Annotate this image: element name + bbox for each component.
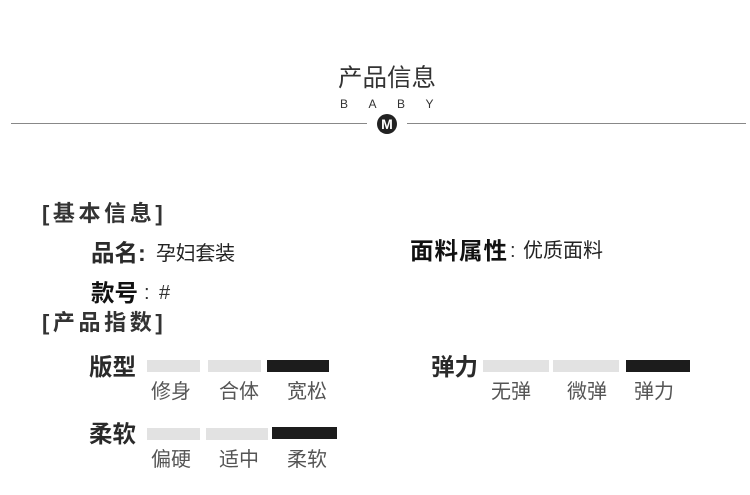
- product name: [91, 240, 235, 266]
- index: softness: [89, 421, 337, 471]
- index: elasticity: [431, 354, 690, 403]
- index: fit: 合体: [219, 381, 259, 403]
- product name: 孕妇套装: [156, 243, 235, 265]
- index: elasticity: 微弹: [567, 381, 607, 403]
- fabric property: [410, 238, 603, 264]
- index: elasticity: 弹力: [431, 354, 478, 380]
- index: softness: 柔软: [287, 449, 327, 471]
- fabric property: 面料属性: [410, 238, 508, 264]
- product name: 品名:: [91, 240, 146, 266]
- index: fit: 版型: [89, 354, 136, 380]
- heading: basic info: [基本信息]: [42, 201, 166, 226]
- style number: #: [159, 282, 170, 304]
- index: elasticity: 无弹: [491, 381, 531, 403]
- title: 产品信息: [338, 65, 436, 92]
- index: fit: 宽松: [287, 381, 327, 403]
- style number: :: [144, 282, 150, 304]
- style number: [91, 280, 170, 306]
- index: softness: 柔软: [89, 421, 136, 447]
- divider with M badge: M: [381, 116, 393, 132]
- subtitle: BABY: BABY: [340, 97, 454, 111]
- index: fit: 修身: [151, 381, 191, 403]
- style number: 款号: [91, 280, 138, 306]
- index: softness: 偏硬: [151, 449, 191, 471]
- heading: product index: [产品指数]: [42, 310, 166, 335]
- index: elasticity: 弹力: [634, 381, 674, 403]
- fabric property: :: [510, 240, 516, 262]
- fabric property: 优质面料: [523, 240, 603, 262]
- index: fit: [89, 354, 329, 403]
- index: softness: 适中: [219, 449, 259, 471]
